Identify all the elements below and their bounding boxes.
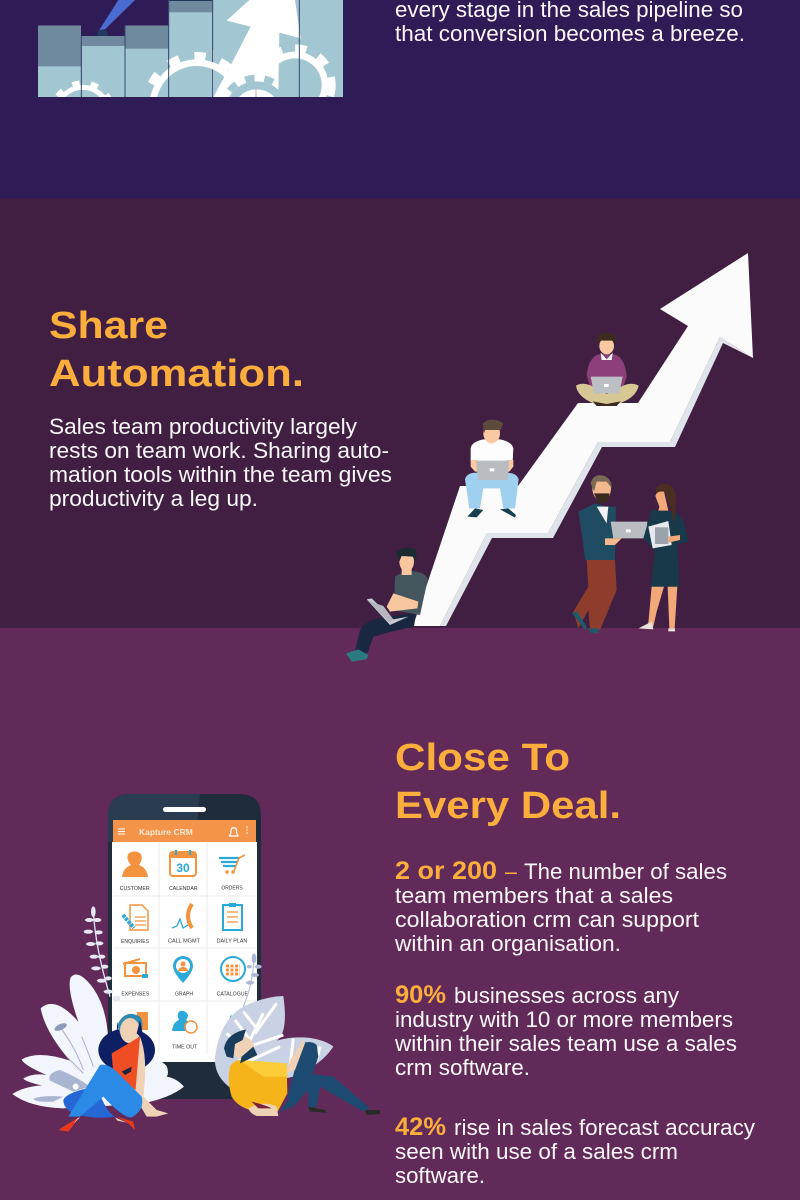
- illustration: bar chart with gears and arrow: [38, 0, 343, 97]
- text: share automation body: mation tools within the team gives: [49, 462, 392, 487]
- stat: 2 or 200: team members that a sales: [395, 883, 673, 908]
- heading: share automation: Automation.: [49, 353, 304, 395]
- panel: share automation: [0, 198, 800, 628]
- stat: 2 or 200: The number of sales: [524, 859, 727, 884]
- text: share automation body: Sales team productivity largely: [49, 414, 357, 439]
- heading: share automation: Share: [49, 305, 168, 347]
- text: top section copy: that conversion becomes a breeze.: [395, 21, 745, 46]
- stat: 2 or 200: collaboration crm can support: [395, 907, 699, 932]
- person: woman in red top: [58, 1014, 168, 1132]
- heading: close to every deal: Close To: [395, 737, 570, 779]
- stat: 90%: crm software.: [395, 1055, 530, 1080]
- app header bar: Kapture CRM: [139, 827, 193, 837]
- stat: 90%: 90%: [395, 981, 446, 1009]
- stat: 2 or 200: [394, 857, 727, 956]
- app menu labels: CALENDAR: [169, 886, 198, 892]
- arrow: rising white arrow: [413, 253, 753, 626]
- app menu labels: CATALOGUE: [217, 991, 248, 997]
- app menu labels: TIME OUT: [172, 1044, 198, 1050]
- stat: 42%: [395, 1113, 755, 1188]
- stat: 42%: 42%: [395, 1113, 446, 1141]
- plant: grey leaves right: [215, 996, 333, 1090]
- app menu labels: DAILY PLAN: [217, 938, 247, 944]
- person: woman in dark dress with papers: [638, 484, 688, 631]
- stat: 42%: software.: [395, 1163, 485, 1188]
- person: seated on ground with laptop: [346, 548, 428, 662]
- stat: 90%: businesses across any: [454, 983, 679, 1008]
- plant: fern sprig right: [243, 953, 262, 1007]
- panel: close to every deal: [0, 628, 800, 1200]
- text: share automation body: [49, 414, 392, 511]
- app menu icons: [122, 850, 245, 1033]
- device: phone body: [108, 794, 261, 1099]
- app menu labels: EXPENSES: [121, 992, 150, 998]
- person: cross-legged top step: [576, 333, 639, 406]
- app menu labels: ENQUIRIES: [121, 939, 149, 945]
- plant: white leaves left: [12, 975, 184, 1108]
- person: bearded man with laptop: [572, 475, 647, 633]
- person: white shirt on step: [465, 420, 519, 518]
- heading: close to every deal: [395, 737, 621, 827]
- app menu labels: [120, 886, 248, 1050]
- stat: 42%: rise in sales forecast accuracy: [454, 1115, 755, 1140]
- illustration: phone with app grid: [108, 794, 261, 1099]
- stat: 90%: [394, 981, 737, 1080]
- stat: 90%: within their sales team use a sales: [394, 1031, 737, 1056]
- plant: fern sprig left: [84, 906, 121, 1001]
- text: top section copy: [395, 0, 745, 46]
- illustration: plants and seated figures: [12, 906, 380, 1132]
- illustration: people with laptops: [346, 333, 688, 662]
- text: share automation body: rests on team work. Sharing auto-: [49, 438, 389, 463]
- app menu labels: CALL MGMT: [168, 939, 201, 945]
- stat: 2 or 200: –: [505, 859, 518, 884]
- heading: share automation: [49, 305, 304, 395]
- stat: 2 or 200: within an organisation.: [394, 931, 621, 956]
- person: man in yellow sweater: [224, 1029, 380, 1116]
- app header bar: [113, 820, 256, 842]
- app menu labels: GRAPH: [175, 991, 193, 997]
- heading: close to every deal: Every Deal.: [395, 785, 621, 827]
- stat: 90%: industry with 10 or more members: [395, 1007, 733, 1032]
- text: share automation body: productivity a leg up.: [49, 486, 258, 511]
- app menu icons: 30: [176, 861, 190, 875]
- stat: 2 or 200: 2 or 200: [395, 857, 497, 885]
- panel: top section: [38, 0, 743, 97]
- app menu labels: ORDERS: [221, 886, 243, 892]
- app menu labels: CUSTOMER: [120, 886, 150, 892]
- stat: 42%: seen with use of a sales crm: [395, 1139, 678, 1164]
